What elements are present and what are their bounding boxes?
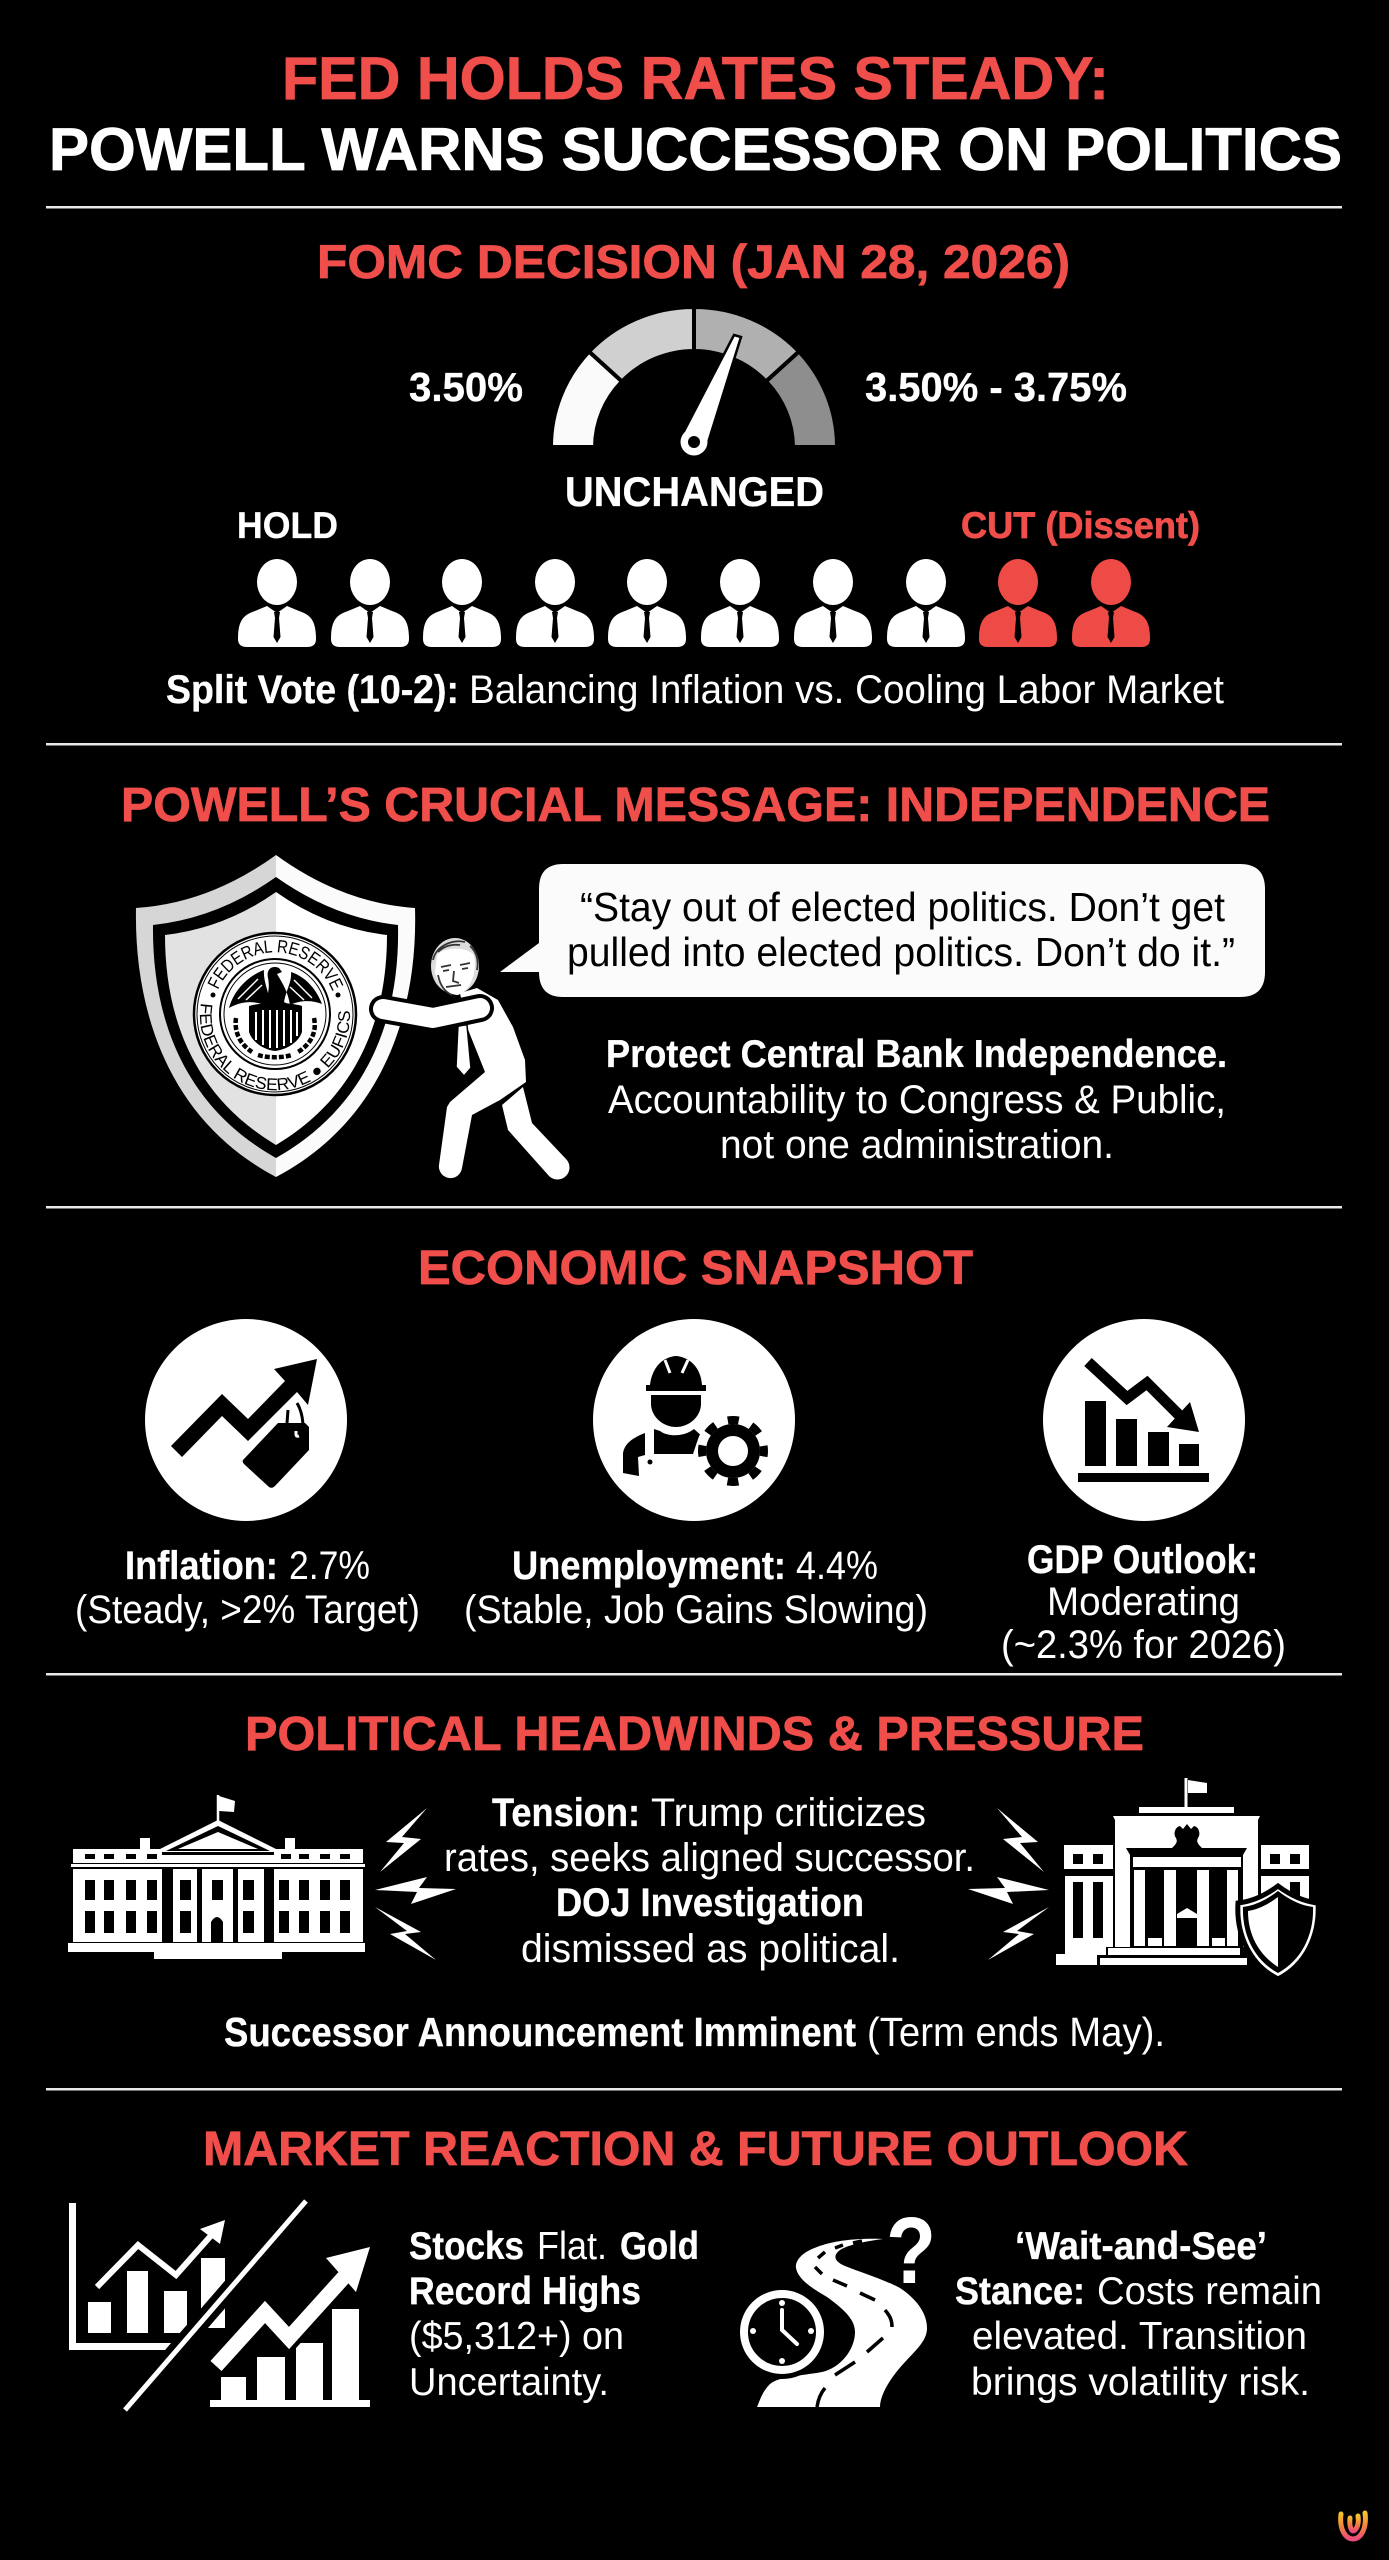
panel: economic snapshot: [75, 1242, 1286, 1667]
heading: independence: POWELL’S CRUCIAL MESSAGE: INDEPENDENCE: [121, 779, 1270, 832]
heading: political headwinds: POLITICAL HEADWINDS & PRESSURE: [245, 1708, 1144, 1761]
text: stocks and gold: Stocks: [409, 2225, 524, 2268]
seal: FEDERAL RESERVE: [208, 940, 344, 991]
label: target range: 3.50% - 3.75%: [865, 364, 1127, 410]
stat: unemployment: [464, 1544, 928, 1632]
split vote caption: Balancing Inflation vs. Cooling Labor Market: [469, 668, 1224, 712]
text: stocks and gold: ($5,312+) on: [409, 2315, 624, 2358]
figure body: [439, 988, 526, 1178]
stat: unemployment: (Stable, Job Gains Slowing): [464, 1588, 928, 1632]
text: stocks and gold: Record Highs: [409, 2270, 641, 2313]
title: POWELL WARNS SUCCESSOR ON POLITICS: [49, 116, 1342, 183]
text: tension: Tension:: [492, 1791, 640, 1835]
eagle: [229, 967, 322, 1008]
text: protect independence: Accountability to Congress & Public,: [608, 1078, 1226, 1122]
text: tension: dismissed as political.: [521, 1927, 900, 1971]
seal shield stripes: [249, 1003, 302, 1051]
stat: inflation: 2.7%: [289, 1544, 370, 1588]
stat: unemployment: Unemployment:: [512, 1544, 786, 1588]
text: wait and see: brings volatility risk.: [971, 2361, 1310, 2404]
text: successor announcement: (Term ends May).: [867, 2009, 1165, 2055]
stat: unemployment: 4.4%: [796, 1544, 878, 1588]
text: wait and see: Stance:: [955, 2270, 1085, 2313]
text: stocks and gold: Gold: [620, 2225, 699, 2268]
figure: Powell pushing the shield: [383, 938, 570, 1180]
label: cut dissent: CUT (Dissent): [961, 505, 1200, 546]
text: protect independence: [606, 1033, 1227, 1167]
title: [49, 45, 1342, 183]
panel: market reaction: [69, 2123, 1322, 2410]
figure tie: [456, 1025, 471, 1076]
seal: [192, 932, 358, 1096]
icon: corner logo: [1341, 2513, 1365, 2539]
split vote caption: Split Vote (10-2):: [166, 668, 459, 712]
label: lower rate: 3.50%: [409, 364, 523, 410]
text: wait and see: ‘Wait-and-See’: [1015, 2225, 1267, 2268]
icon: unemployment worker: [593, 1319, 795, 1521]
heading: economic snapshot: ECONOMIC SNAPSHOT: [418, 1242, 973, 1295]
text: wait and see: elevated. Transition: [972, 2315, 1307, 2358]
text: wait and see: [955, 2225, 1322, 2404]
text: protect independence: not one administration.: [720, 1123, 1114, 1167]
text: stocks and gold: Flat.: [537, 2225, 607, 2268]
icon: Federal Reserve shield: [136, 855, 416, 1177]
icon: lightning bolts right: [968, 1808, 1049, 1960]
split vote caption: [166, 668, 1224, 712]
vote icons: eight hold: [238, 559, 965, 647]
label: hold: HOLD: [237, 505, 338, 546]
panel: FOMC decision: [166, 235, 1224, 712]
stat: inflation: [75, 1544, 420, 1632]
icon: White House: [68, 1795, 365, 1959]
speech bubble: pulled into elected politics. Don’t do it.”: [567, 929, 1235, 975]
figure head: [431, 938, 479, 995]
text: protect independence: Protect Central Bank Independence.: [606, 1033, 1227, 1076]
icon: clock: [735, 2285, 829, 2379]
icon: question mark: ?: [886, 2198, 936, 2304]
heading: market reaction: MARKET REACTION & FUTURE OUTLOOK: [203, 2123, 1188, 2176]
icon: stock charts: [69, 2201, 370, 2410]
speech bubble: “Stay out of elected politics. Don’t get: [580, 884, 1226, 930]
text: tension: DOJ Investigation: [556, 1881, 864, 1925]
text: stocks and gold: Uncertainty.: [409, 2361, 609, 2404]
vote icons: two dissent: [979, 559, 1150, 647]
figure arm: [383, 1008, 480, 1018]
figure rear leg: [502, 1087, 570, 1180]
text: tension: [444, 1791, 975, 1971]
panel: Powell's message: [121, 779, 1270, 1180]
text: stocks and gold: [409, 2225, 699, 2404]
title: FED HOLDS RATES STEADY:: [282, 45, 1109, 112]
seal: FEDERAL RESERVE ● EUFICS: [200, 1004, 350, 1090]
stat: GDP outlook: GDP Outlook:: [1027, 1538, 1258, 1582]
icon: winding road with clock and question mark: [735, 2198, 936, 2407]
stat: GDP outlook: Moderating: [1047, 1580, 1240, 1624]
text: tension: rates, seeks aligned successor.: [444, 1836, 975, 1880]
text: successor announcement: Successor Announcement Imminent: [224, 2009, 856, 2055]
stat: inflation: Inflation:: [125, 1544, 278, 1588]
heading: FOMC decision: FOMC DECISION (JAN 28, 2026): [317, 235, 1070, 288]
icon: GDP outlook: [1043, 1319, 1245, 1521]
small shield: [1238, 1886, 1318, 1979]
text: tension: Trump criticizes: [651, 1791, 926, 1835]
text: wait and see: Costs remain: [1097, 2270, 1322, 2313]
label: unchanged: UNCHANGED: [565, 468, 824, 515]
stat: GDP outlook: [1001, 1538, 1286, 1667]
stat: GDP outlook: (~2.3% for 2026): [1001, 1623, 1286, 1667]
laurel branches: [236, 1018, 315, 1057]
panel: political headwinds: [68, 1708, 1318, 2055]
gauge: [551, 307, 837, 456]
stat: inflation: (Steady, >2% Target): [75, 1588, 420, 1632]
icon: lightning bolts left: [375, 1808, 456, 1960]
icon: Federal Reserve building with shield: [1056, 1778, 1318, 1979]
speech bubble: [500, 864, 1265, 997]
icon: inflation: [145, 1319, 347, 1521]
